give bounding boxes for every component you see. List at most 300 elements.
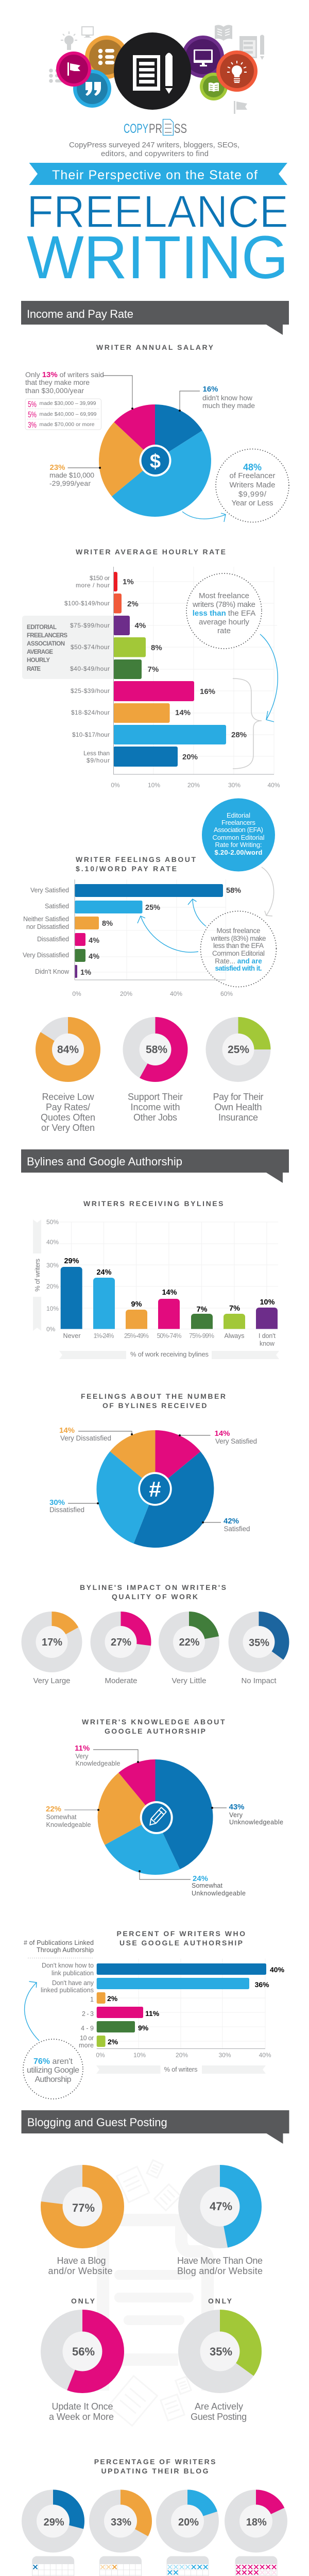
donut: update once a week: a Week or More xyxy=(49,2412,114,2422)
icon: blue quote badge xyxy=(73,70,111,108)
heading: writer feelings about pay rate: $.10/WORD PAY RATE xyxy=(76,865,177,873)
bar chart: hourly rate: more / hour xyxy=(76,582,110,589)
callout circle: 78 percent: average hourly xyxy=(199,618,249,626)
label: very dissatisfied 14 percent: Very Dissatisfied xyxy=(60,1434,111,1442)
donut: 58 percent other jobs: Other Jobs xyxy=(133,1112,177,1123)
donut: no impact: No Impact xyxy=(241,1676,277,1685)
bar chart: hourly rate: 1% xyxy=(123,578,134,586)
label: somewhat knowledgeable 22 percent: Knowledgeable xyxy=(46,1821,91,1828)
axis title: percent of writers xyxy=(33,1219,41,1331)
donut: no impact xyxy=(229,1612,289,1685)
bar chart: hourly rate: $10-$17/hour xyxy=(72,731,110,738)
section header: blogging and guest posting: Blogging and Guest Posting xyxy=(27,2116,167,2129)
table: salaries above 30k: 5% xyxy=(28,411,37,419)
donut: have a blog: and/or Website xyxy=(48,2266,112,2276)
title: FREELANCE: FREELANCE xyxy=(27,186,288,237)
callout circle: 78 percent: less than the EFA xyxy=(193,609,255,618)
panel: EFA average range: FREELANCERS xyxy=(27,633,67,639)
heading: feelings about bylines: OF BYLINES RECEIVED xyxy=(102,1401,207,1410)
logo: CopyPress: COPY xyxy=(124,122,148,136)
label: somewhat unknowledgeable 24 percent: Unknowledgeable xyxy=(192,1890,246,1897)
bar chart: hourly rate xyxy=(22,567,280,789)
pie chart: feelings about bylines: # xyxy=(149,1477,161,1501)
bar chart: publications linked through authorship: 36% xyxy=(255,1980,269,1989)
heading: byline's impact on quality xyxy=(80,1583,226,1601)
callout circle: 48 percent: of Freelancer xyxy=(230,471,275,480)
label: dissatisfied 30 percent: Dissatisfied xyxy=(49,1506,84,1514)
bar chart: feelings about pay: 0% xyxy=(72,990,81,997)
callout: 13 percent over 30k xyxy=(25,370,133,410)
callout: 16 percent: 16% xyxy=(203,385,218,394)
label: only left: ONLY xyxy=(71,2297,95,2305)
bar chart: writers receiving bylines: Never xyxy=(63,1332,80,1340)
donut: no impact: 35% xyxy=(249,1637,269,1649)
donut: 25 percent health insurance: Pay for Their xyxy=(213,1092,264,1102)
icon: grey book xyxy=(215,25,232,41)
icon: green book badge xyxy=(200,73,228,100)
callout: 23 percent: 23% xyxy=(49,463,65,472)
axis heading: number of publications: # of Publications Linked xyxy=(24,1939,94,1946)
panel: EFA average range xyxy=(22,616,113,679)
callout circle: 78 percent: Most freelance xyxy=(199,591,249,600)
bar chart: publications linked through authorship: 30% xyxy=(218,2052,231,2059)
bar chart: hourly rate: $150 or xyxy=(90,574,110,582)
heading: writer's knowledge about google authorship: WRITER'S KNOWLEDGE ABOUT xyxy=(82,1718,225,1726)
label: satisfied 42 percent: Satisfied xyxy=(224,1525,250,1533)
label: very knowledgeable 11 percent: 11% xyxy=(75,1744,90,1753)
donut: 84 percent low pay xyxy=(36,1017,100,1133)
arrow: 78 percent to brace xyxy=(260,634,278,722)
bar chart: publications linked through authorship: 4 - 9 xyxy=(81,2025,94,2032)
icon: grey monitor xyxy=(82,27,93,38)
bar chart: writers receiving bylines: 10% xyxy=(260,1298,275,1307)
bar chart: feelings about pay: Didn't Know xyxy=(35,968,70,975)
callout circle: 48 percent: Writers Made xyxy=(230,481,275,489)
logo: CopyPress xyxy=(124,120,187,136)
bar chart: hourly rate: 20% xyxy=(187,782,200,789)
bar chart: feelings about pay: 40% xyxy=(170,990,182,997)
heading: percent of writers who use google authorship xyxy=(116,1929,245,1947)
label: very knowledgeable 11 percent: Knowledgeable xyxy=(75,1760,121,1767)
donut: 25 percent health insurance: Insurance xyxy=(218,1112,258,1123)
bar chart: feelings about pay: 4% xyxy=(89,953,99,961)
label: very knowledgeable 11 percent xyxy=(75,1744,139,1767)
donut and calendar: 2-3 articles per month: 33% xyxy=(111,2517,131,2528)
donut: moderate impact: 27% xyxy=(111,1637,131,1648)
bar chart: writers receiving bylines: 10% xyxy=(46,1305,59,1312)
panel: EFA average range: HOURLY xyxy=(27,657,50,664)
bar chart: publications linked through authorship: 2 - 3 xyxy=(82,2010,94,2018)
heading: feelings about bylines: FEELINGS ABOUT THE NUMBER xyxy=(81,1392,226,1400)
heading: writer feelings about pay rate: WRITER FEELINGS ABOUT xyxy=(76,855,196,863)
bar chart: hourly rate: 8% xyxy=(151,643,162,652)
panel: EFA average range: EDITORIAL xyxy=(27,624,57,631)
bar chart: publications linked through authorship: Don't know how to xyxy=(42,1962,94,1969)
table: salaries above 30k: 5% xyxy=(28,400,37,409)
heading: percentage of writers updating their blog xyxy=(94,2458,215,2475)
bar chart: publications linked through authorship xyxy=(24,1939,285,2074)
donut: very little impact: Very Little xyxy=(172,1676,206,1685)
callout: 23 percent: made $10,000 xyxy=(49,471,94,479)
label: very satisfied 14 percent: Very Satisfied xyxy=(215,1437,257,1445)
donut and calendar: 10 or more articles per month xyxy=(225,2489,287,2576)
bar chart: feelings about pay: 4% xyxy=(89,937,99,945)
bar chart: writers receiving bylines: 14% xyxy=(162,1289,177,1297)
icon: pencil xyxy=(147,1807,166,1827)
callout circle: 83 percent: less than the EFA xyxy=(213,942,264,950)
label: satisfied 42 percent xyxy=(202,1517,250,1533)
donut and calendar: 2-3 articles per month xyxy=(89,2489,152,2576)
donut: very large impact: Very Large xyxy=(33,1676,70,1685)
heading: writers receiving bylines: WRITERS RECEIVING BYLINES xyxy=(83,1199,224,1208)
bar chart: publications linked through authorship: 20% xyxy=(176,2052,188,2059)
icon: calendar with 9 marks xyxy=(167,2556,209,2576)
bar chart: publications linked through authorship: 2% xyxy=(108,2038,118,2046)
intro text xyxy=(69,141,239,158)
callout: 13 percent over 30k: Only 13% of writers said xyxy=(25,370,104,379)
bar chart: writers receiving bylines: I don't xyxy=(259,1332,276,1340)
label: very dissatisfied 14 percent xyxy=(59,1426,133,1442)
callout circle: 76 percent xyxy=(23,2039,83,2099)
table: salaries above 30k: made $30,000 – 39,999 xyxy=(39,400,96,406)
axis title: percent of work receiving bylines xyxy=(59,1350,279,1359)
label: somewhat unknowledgeable 24 percent xyxy=(139,1870,246,1897)
bar chart: feelings about pay xyxy=(23,879,241,997)
label: somewhat knowledgeable 22 percent xyxy=(46,1805,99,1828)
bar chart: feelings about pay: Dissatisfied xyxy=(37,936,69,943)
donut: very little impact: 22% xyxy=(179,1637,200,1648)
heading: percentage of writers updating their blog: PERCENTAGE OF WRITERS xyxy=(94,2458,215,2466)
donut: 58 percent other jobs: 58% xyxy=(146,1044,167,1056)
label: only right: ONLY xyxy=(208,2297,232,2305)
callout circle: 83 percent: Rate... and are xyxy=(215,957,262,965)
donut: 58 percent other jobs: Support Their xyxy=(128,1092,183,1102)
callout circle: 48 percent: 48% xyxy=(243,462,262,472)
bar chart: hourly rate: $40-$49/hour xyxy=(70,665,110,672)
callout circle: 76 percent: Authorship xyxy=(35,2075,72,2084)
label: very satisfied 14 percent xyxy=(179,1429,257,1445)
arrow: grey EFA to 83 percent xyxy=(262,867,274,916)
donut: more than one blog xyxy=(177,2165,263,2276)
donut: 58 percent other jobs xyxy=(123,1017,187,1123)
heading: writer average hourly rate: WRITER AVERAGE HOURLY RATE xyxy=(76,548,226,556)
bar chart: writers receiving bylines: 7% xyxy=(229,1304,240,1313)
icon: grey flag xyxy=(234,101,247,114)
bar chart: publications linked through authorship: 2% xyxy=(107,1994,118,2003)
callout circle: 48 percent xyxy=(216,449,289,522)
arrow: 83 percent to 25 percent bar xyxy=(138,916,198,952)
bar chart: writers receiving bylines: 30% xyxy=(46,1262,59,1269)
donut: guest posting: Guest Posting xyxy=(191,2412,247,2422)
callout circle: EFA common rate: Common Editorial xyxy=(212,834,265,841)
bar chart: publications linked through authorship: more xyxy=(79,2042,94,2049)
bar chart: feelings about pay: Very Satisfied xyxy=(30,887,69,894)
bar chart: writers receiving bylines: 0% xyxy=(46,1326,56,1333)
callout circle: 48 percent: Year or Less xyxy=(232,499,273,507)
title ribbon: Their Perspective on the State of xyxy=(52,168,258,182)
callout: 16 percent: didn't know how xyxy=(202,394,253,402)
bar chart: hourly rate: $75-$99/hour xyxy=(70,622,110,629)
heading: writer feelings about pay rate xyxy=(76,855,196,873)
bar chart: feelings about pay: 25% xyxy=(145,904,160,912)
donut: 84 percent low pay: Pay Rates/ xyxy=(46,1102,90,1112)
heading: percentage of writers updating their blog: UPDATING THEIR BLOG xyxy=(101,2467,209,2475)
label: very unknowledgeable 43 percent: Unknowledgeable xyxy=(229,1819,283,1826)
callout circle: 83 percent: Most freelance xyxy=(216,927,261,935)
title: WRITING: WRITING xyxy=(27,224,288,292)
donut: more than one blog: Blog and/or Website xyxy=(177,2266,263,2276)
donut: very large impact xyxy=(22,1612,82,1685)
icon: document and pencil badge xyxy=(114,32,191,110)
bar chart: publications linked through authorship: link publication xyxy=(52,1970,94,1977)
table: salaries above 30k: 3% xyxy=(28,421,37,430)
icon: grey lamp xyxy=(61,31,77,50)
pie chart: annual salary: $ xyxy=(150,451,161,472)
bar chart: publications linked through authorship: 1 xyxy=(90,1996,94,2003)
bar chart: writers receiving bylines: 50%-74% xyxy=(157,1332,181,1340)
bar chart: hourly rate: 40% xyxy=(267,782,280,789)
donut: 84 percent low pay: 84% xyxy=(57,1044,79,1056)
callout circle: 48 percent: $9,999/ xyxy=(238,490,267,499)
axis heading: number of publications: Through Authorship xyxy=(37,1946,94,1954)
donut and calendar: 4-9 articles per month: 20% xyxy=(178,2517,199,2528)
bar chart: hourly rate: 28% xyxy=(231,731,247,739)
bar chart: hourly rate: 0% xyxy=(111,782,120,789)
callout circle: 83 percent: satisfied with it. xyxy=(215,964,262,972)
axis title: percent of writers: % of writers xyxy=(164,2065,198,2073)
donut: have a blog xyxy=(41,2165,124,2276)
callout circle: EFA common rate: $.20-2.00/word xyxy=(214,849,263,856)
bar chart: writers receiving bylines: 40% xyxy=(46,1239,59,1246)
arrow: pie to 48 percent xyxy=(182,512,226,522)
bar chart: publications linked through authorship: 40% xyxy=(259,2052,271,2059)
callout: 23 percent xyxy=(49,463,101,487)
bar chart: hourly rate: 20% xyxy=(182,753,198,761)
label: somewhat unknowledgeable 24 percent: Somewhat xyxy=(192,1882,223,1889)
donut: update once a week: Update It Once xyxy=(52,2401,113,2412)
donut: moderate impact: Moderate xyxy=(105,1676,137,1685)
bar chart: feelings about pay: 20% xyxy=(120,990,132,997)
label: dissatisfied 30 percent xyxy=(49,1498,99,1514)
heading: byline's impact on quality: BYLINE'S IMPACT ON WRITER'S xyxy=(80,1583,226,1591)
donut and calendar: 1 article per month xyxy=(22,2489,84,2576)
bar chart: hourly rate: 7% xyxy=(147,665,159,674)
section header: income and pay rate: Income and Pay Rate xyxy=(27,308,133,320)
axis title: percent of writers xyxy=(96,2065,266,2074)
bar chart: writers receiving bylines: 24% xyxy=(96,1268,112,1277)
bar chart: writers receiving bylines xyxy=(33,1218,279,1359)
bar chart: hourly rate: 10% xyxy=(148,782,160,789)
donut: have a blog: Have a Blog xyxy=(57,2256,106,2266)
bar chart: hourly rate: $100-$149/hour xyxy=(64,600,110,607)
label: very unknowledgeable 43 percent xyxy=(211,1803,283,1826)
bar chart: publications linked through authorship: 0% xyxy=(96,2052,105,2059)
icon: red lamp badge xyxy=(216,50,258,92)
donut: guest posting xyxy=(178,2310,262,2422)
label: very knowledgeable 11 percent: Very xyxy=(75,1753,89,1760)
panel: EFA average range: RATE xyxy=(27,666,41,672)
bar chart: writers receiving bylines: 25%-49% xyxy=(124,1332,149,1340)
bar chart: hourly rate: $25-$39/hour xyxy=(71,687,110,694)
donut: 58 percent other jobs: Income with xyxy=(131,1102,180,1112)
heading: writer's knowledge about google authorship: GOOGLE AUTHORSHIP xyxy=(105,1727,205,1735)
bar chart: hourly rate: Less than xyxy=(83,750,110,757)
bar chart: publications linked through authorship: 9% xyxy=(138,2024,149,2032)
donut: more than one blog: Have More Than One xyxy=(177,2256,263,2266)
heading: percent of writers who use google authorship: USE GOOGLE AUTHORSHIP xyxy=(119,1939,243,1947)
bar chart: writers receiving bylines: know xyxy=(260,1340,275,1347)
section header: bylines and google authorship xyxy=(21,1149,289,1183)
callout circle: 76 percent: 76% aren't xyxy=(33,2057,73,2066)
bar chart: publications linked through authorship: 10 or xyxy=(80,2035,94,2042)
donut: have a blog: 77% xyxy=(72,2201,95,2214)
callout circle: 83 percent: Common Editorial xyxy=(212,950,265,957)
donut: 84 percent low pay: or Very Often xyxy=(41,1123,95,1133)
donut: 25 percent health insurance: 25% xyxy=(228,1044,249,1056)
bar chart: hourly rate: 14% xyxy=(175,708,191,717)
bar chart: writers receiving bylines: 20% xyxy=(46,1283,59,1290)
logo: CopyPress: PR xyxy=(149,122,162,136)
bar chart: writers receiving bylines: 50% xyxy=(46,1218,59,1226)
intro text: CopyPress surveyed 247 writers, bloggers, SEOs, xyxy=(69,141,239,149)
donut: update once a week: 56% xyxy=(72,2345,95,2358)
table: salaries above 30k: made $70,000 or more xyxy=(39,421,95,428)
bar chart: feelings about pay: Satisfied xyxy=(45,903,69,910)
panel: EFA average range: ASSOCIATION xyxy=(27,641,65,647)
section header: blogging and guest posting xyxy=(22,2110,289,2144)
callout: 13 percent over 30k: that they make more xyxy=(25,378,90,386)
bar chart: publications linked through authorship: 11% xyxy=(145,2009,160,2018)
donut: 25 percent health insurance xyxy=(206,1017,271,1123)
donut: 84 percent low pay: Receive Low xyxy=(42,1092,95,1102)
heading: feelings about bylines xyxy=(81,1392,226,1410)
donut: guest posting: Are Actively xyxy=(195,2401,243,2412)
bar chart: publications linked through authorship: 40% xyxy=(270,1965,285,1974)
donut and calendar: 10 or more articles per month: 18% xyxy=(246,2517,267,2528)
bar chart: feelings about pay: Very Dissatisfied xyxy=(23,952,69,959)
bar chart: hourly rate: 2% xyxy=(127,600,139,608)
donut: 84 percent low pay: Quotes Often xyxy=(41,1112,95,1123)
callout: 23 percent: -29,999/year xyxy=(49,479,91,487)
bar chart: feelings about pay: 1% xyxy=(80,969,91,977)
label: satisfied 42 percent: 42% xyxy=(224,1517,239,1526)
label: somewhat unknowledgeable 24 percent: 24% xyxy=(193,1874,208,1883)
bar chart: writers receiving bylines: 9% xyxy=(131,1300,142,1309)
label: very unknowledgeable 43 percent: 43% xyxy=(229,1803,245,1811)
bar chart: feelings about pay: nor Dissatisfied xyxy=(26,923,69,930)
axis title: percent of work receiving bylines: % of work receiving bylines xyxy=(130,1350,209,1358)
pie chart: google authorship knowledge xyxy=(98,1759,213,1875)
section header: bylines and google authorship: Bylines and Google Authorship xyxy=(27,1155,182,1168)
bar chart: feelings about pay: Neither Satisfied xyxy=(23,916,69,923)
axis title: percent of writers: % of writers xyxy=(33,1258,41,1292)
callout circle: 83 percent xyxy=(201,911,276,987)
bar chart: feelings about pay: 60% xyxy=(220,990,233,997)
bar chart: hourly rate: 16% xyxy=(200,687,215,696)
label: dissatisfied 30 percent: 30% xyxy=(49,1498,65,1507)
callout circle: 78 percent xyxy=(186,573,262,649)
icon: calendar with 3 marks xyxy=(100,2556,141,2576)
bar chart: feelings about pay: 8% xyxy=(102,920,113,928)
bar chart: hourly rate: $9/hour xyxy=(87,757,110,764)
donut and calendar: 4-9 articles per month xyxy=(156,2489,219,2576)
callout circle: 78 percent: writers (78%) make xyxy=(192,600,255,609)
icon: grey document and pencil xyxy=(239,35,264,60)
bar chart: writers receiving bylines: 29% xyxy=(64,1257,79,1265)
icon: grey list xyxy=(49,69,63,83)
background watermark: document and papers xyxy=(103,2160,208,2426)
donut: very large impact: 17% xyxy=(42,1637,62,1648)
callout circle: EFA common rate: Rate for Writing: xyxy=(215,841,262,849)
callout: 16 percent: much they made xyxy=(202,401,255,410)
callout circle: EFA common rate xyxy=(202,799,275,872)
donut: guest posting: 35% xyxy=(210,2345,232,2358)
intro text: editors, and copywriters to find xyxy=(101,149,209,158)
bar chart: publications linked through authorship: linked publications xyxy=(41,1987,94,1994)
icon: calendar with many marks xyxy=(235,2556,277,2576)
bar chart: writers receiving bylines: Always xyxy=(225,1332,244,1340)
callout circle: 78 percent: rate xyxy=(217,626,231,635)
callout circle: 83 percent: writers (83%) make xyxy=(210,935,266,942)
heading: percent of writers who use google authorship: PERCENT OF WRITERS WHO xyxy=(116,1929,245,1938)
donut: more than one blog: 47% xyxy=(210,2200,232,2213)
donut and calendar: 1 article per month: 29% xyxy=(44,2517,64,2528)
icon: magenta flag badge xyxy=(56,52,91,87)
bar chart: publications linked through authorship: 10% xyxy=(133,2052,146,2059)
section header: income and pay rate xyxy=(21,301,289,335)
callout circle: EFA common rate: Freelancers xyxy=(221,819,255,826)
label: very satisfied 14 percent: 14% xyxy=(214,1429,230,1438)
axis heading: number of publications xyxy=(24,1939,94,1958)
title ribbon xyxy=(29,163,287,185)
label: very unknowledgeable 43 percent: Very xyxy=(229,1811,243,1819)
table: salaries above 30k: made $40,000 – 69,999 xyxy=(39,411,97,417)
heading: byline's impact on quality: QUALITY OF WORK xyxy=(112,1592,198,1601)
label: very dissatisfied 14 percent: 14% xyxy=(59,1426,75,1435)
icon: purple monitor badge xyxy=(182,36,224,78)
callout circle: 76 percent: utilizing Google xyxy=(27,2066,79,2075)
table: salaries above 30k xyxy=(25,399,101,430)
header icon cluster xyxy=(49,25,264,114)
callout circle: EFA common rate: Association (EFA) xyxy=(214,826,263,834)
callout: 13 percent over 30k: than $30,000/year xyxy=(25,386,84,395)
bar chart: writers receiving bylines: 1%-24% xyxy=(94,1332,114,1340)
heading: writer's knowledge about google authorship xyxy=(82,1718,225,1735)
arrow: 83 percent to 58 percent bar xyxy=(188,899,206,926)
panel: EFA average range: AVERAGE xyxy=(27,649,53,655)
bar chart: feelings about pay: 58% xyxy=(226,887,241,895)
bar chart: writers receiving bylines: 7% xyxy=(197,1306,208,1314)
bar chart: hourly rate: $50-$74/hour xyxy=(71,643,110,651)
icon: calendar with 1 mark xyxy=(32,2556,74,2576)
label: somewhat knowledgeable 22 percent: Somewhat xyxy=(46,1814,77,1821)
donut: update once a week xyxy=(41,2310,124,2422)
label: somewhat knowledgeable 22 percent: 22% xyxy=(46,1805,61,1814)
donut: 25 percent health insurance: Own Health xyxy=(214,1102,262,1112)
icon: orange list badge xyxy=(85,36,128,79)
pie chart: feelings about bylines xyxy=(96,1430,214,1548)
bar chart: hourly rate: 30% xyxy=(228,782,241,789)
donut: moderate impact xyxy=(91,1612,151,1685)
heading: writer annual salary: WRITER ANNUAL SALARY xyxy=(96,343,214,351)
arrow: 76 percent to bars xyxy=(25,1981,39,2041)
bar chart: writers receiving bylines: 75%-99% xyxy=(189,1332,214,1340)
bar chart: hourly rate: 4% xyxy=(135,621,146,630)
logo: CopyPress: SS xyxy=(174,122,187,136)
donut: very little impact xyxy=(159,1612,219,1685)
brace: low hourly rates xyxy=(233,679,262,769)
pie chart: annual salary xyxy=(99,404,211,517)
